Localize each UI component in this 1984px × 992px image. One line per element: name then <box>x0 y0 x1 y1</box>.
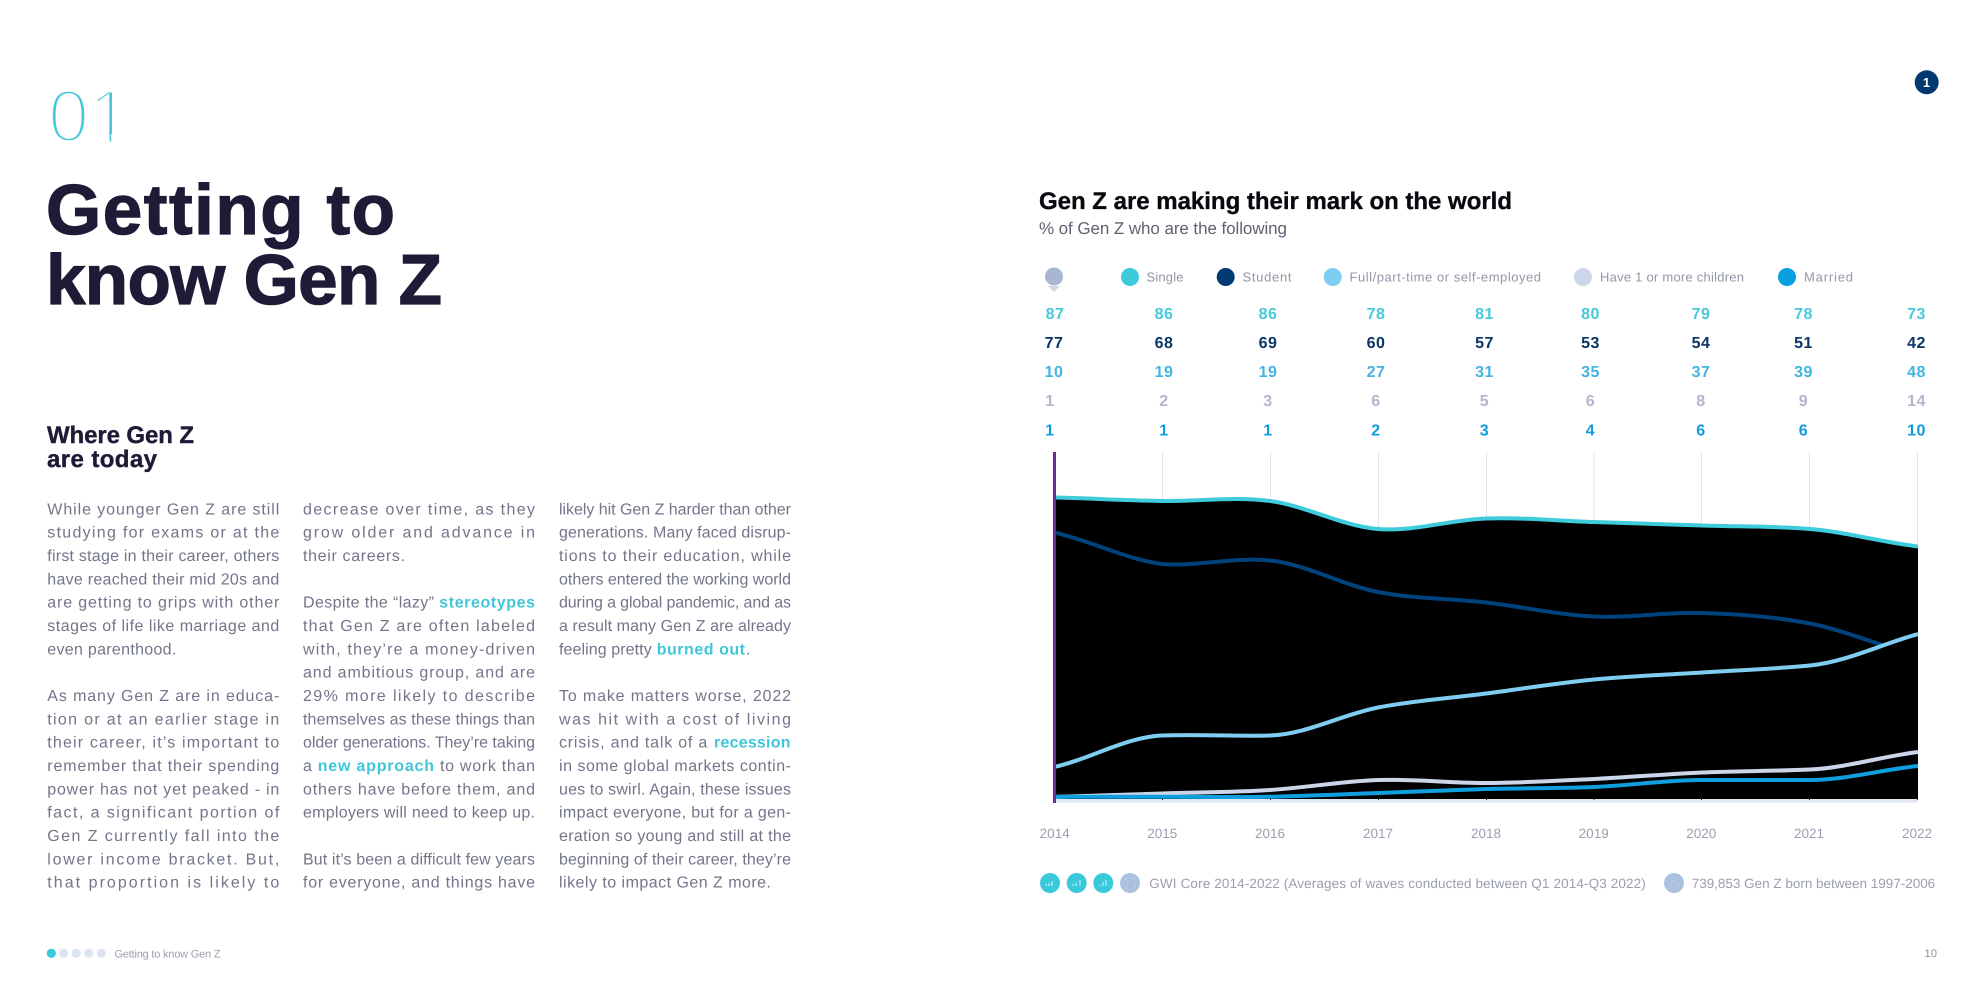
data row: married: 6 <box>1799 422 1808 440</box>
body text column 3: eration so young and still at the <box>559 828 791 845</box>
chart subtitle: % of Gen Z who are the following <box>1039 219 1287 238</box>
data row: employed: 19 <box>1259 364 1277 381</box>
body text column 3: a result many Gen Z are already <box>559 618 791 635</box>
body text column 2: with, they’re a money-driven <box>302 641 535 658</box>
data row: employed: 10 <box>1045 364 1063 381</box>
data row: single: 78 <box>1367 306 1385 323</box>
section number <box>52 92 112 142</box>
icon: globe <box>1120 873 1140 893</box>
y axis <box>1053 452 1056 803</box>
body text column 2: 29% more likely to describe <box>303 688 535 705</box>
body text column 1: tion or at an earlier stage in <box>47 711 279 728</box>
data row: single: 78 <box>1794 306 1813 323</box>
data row: children: 1 <box>1045 393 1055 410</box>
body text column 3: generations. Many faced disrup- <box>559 525 791 542</box>
footer: section name: Getting to know Gen Z <box>114 948 221 960</box>
body text column 1 <box>47 501 280 892</box>
body text column 3: likely to impact Gen Z more. <box>559 875 771 892</box>
data row: employed <box>1045 364 1926 381</box>
body text column 2: for everyone, and things have <box>303 875 535 892</box>
series: single <box>1056 500 1918 764</box>
legend item: married <box>1778 268 1853 286</box>
title <box>46 171 442 320</box>
x axis year labels: 2020 <box>1686 826 1716 841</box>
data row: children: 14 <box>1907 393 1926 410</box>
data row: employed: 27 <box>1367 364 1385 381</box>
data row: married: 6 <box>1696 422 1706 440</box>
subheading: Where Gen Z <box>47 422 194 449</box>
x axis year labels: 2019 <box>1579 826 1609 841</box>
body text column 1: lower income bracket. But, <box>47 851 279 868</box>
data row: single: 81 <box>1475 306 1494 323</box>
body text column 2: Despite the “lazy” <box>303 595 434 612</box>
body text column 3 <box>558 501 792 892</box>
body text column 2: to work than <box>440 758 535 775</box>
body text column 3: was hit with a cost of living <box>558 711 791 728</box>
data row: student: 69 <box>1259 335 1277 352</box>
data row: student: 54 <box>1692 335 1710 352</box>
body text column 2: others have before them, and <box>303 781 535 798</box>
source text: GWI Core 2014-2022 (Averages of waves conducted between Q1 2014-Q3 2022) <box>1149 876 1646 891</box>
body text column 1: have reached their mid 20s and <box>47 571 279 588</box>
data row: single <box>1046 306 1926 323</box>
data row: employed: 31 <box>1475 364 1494 381</box>
legend item: single: Single <box>1146 270 1184 284</box>
body text column 3: recession <box>714 735 790 752</box>
legend item: student: Student <box>1242 270 1292 284</box>
data row: employed: 35 <box>1581 364 1600 381</box>
page number: 10 <box>1924 948 1937 960</box>
legend item: single <box>1121 268 1184 286</box>
body text column 3: ues to swirl. Again, these issues <box>559 781 791 798</box>
line chart <box>1053 452 1918 803</box>
body text column 2: their careers. <box>303 548 405 565</box>
section number: 1 <box>89 74 130 158</box>
data row: married: 1 <box>1045 422 1055 440</box>
data row: married: 4 <box>1586 422 1595 440</box>
body text column 1: are getting to grips with other <box>47 595 280 612</box>
data row: children <box>1045 393 1926 410</box>
body text column 2: stereotypes <box>439 595 535 612</box>
data row: married: 3 <box>1480 422 1489 440</box>
icon: chart 2 <box>1067 873 1087 893</box>
body text column 1: their career, it’s important to <box>47 735 279 752</box>
body text column 2: But it’s been a difficult few years <box>303 851 535 868</box>
data row: employed: 39 <box>1794 364 1813 381</box>
body text column 1: power has not yet peaked - in <box>47 781 279 798</box>
data row: children: 6 <box>1371 393 1381 410</box>
legend <box>1045 268 1853 292</box>
body text column 2: employers will need to keep up. <box>303 805 535 822</box>
series: employed <box>1884 645 1918 657</box>
body text column 2: grow older and advance in <box>303 525 535 542</box>
data row: children: 9 <box>1799 393 1808 410</box>
data row: student: 77 <box>1045 335 1063 352</box>
data row: children: 3 <box>1263 393 1273 410</box>
body text column 3: crisis, and talk of a <box>559 735 707 752</box>
body text column 1: stages of life like marriage and <box>47 618 279 635</box>
data row: student <box>1045 335 1926 352</box>
body text column 2 <box>302 501 535 892</box>
icon: sample <box>1664 873 1684 893</box>
data row: student: 60 <box>1367 335 1385 352</box>
body text column 3: likely hit Gen Z harder than other <box>559 501 792 518</box>
body text column 1: As many Gen Z are in educa- <box>47 688 279 705</box>
data row: single: 87 <box>1046 306 1064 323</box>
body text column 2: decrease over time, as they <box>303 501 535 518</box>
series: student <box>1056 530 1884 646</box>
section number: 0 <box>48 74 89 158</box>
body text column 1: remember that their spending <box>47 758 279 775</box>
data row: children: 6 <box>1586 393 1595 410</box>
icon: location pin <box>1045 268 1063 292</box>
body text column 2: that Gen Z are often labeled <box>303 618 535 635</box>
body text column 1: Gen Z currently fall into the <box>47 828 279 845</box>
data row: children: 5 <box>1480 393 1489 410</box>
body text column 1: first stage in their career, others <box>47 548 279 565</box>
data row: student: 53 <box>1581 335 1600 352</box>
body text column 3: . <box>746 641 750 658</box>
footer: section progress dots <box>47 949 106 958</box>
body text column 3: feeling pretty <box>559 641 652 658</box>
subheading: are today <box>47 446 158 473</box>
data row: married: 1 <box>1159 422 1169 440</box>
body text column 1: that proportion is likely to <box>47 875 279 892</box>
legend item: student <box>1217 268 1292 286</box>
icon: chart 1 <box>1040 873 1060 893</box>
body text column 1: fact, a significant portion of <box>47 805 280 822</box>
x axis year labels: 2014 <box>1040 826 1070 841</box>
data row: single: 73 <box>1907 306 1926 323</box>
body text column 3: during a global pandemic, and as <box>559 595 791 612</box>
data row: employed: 37 <box>1692 364 1710 381</box>
body text column 1: While younger Gen Z are still <box>47 501 279 518</box>
data row: single: 86 <box>1155 306 1173 323</box>
title: Getting to <box>46 171 395 250</box>
body text column 2: themselves as these things than <box>303 711 535 728</box>
body text column 3: tions to their education, while <box>559 548 791 565</box>
data row: single: 86 <box>1259 306 1277 323</box>
body text column 2: a <box>303 758 312 775</box>
data row: married: 10 <box>1907 422 1926 440</box>
data row: single: 80 <box>1581 306 1600 323</box>
title: know Gen Z <box>46 241 442 320</box>
series: children <box>1054 752 1918 797</box>
data row: student: 51 <box>1794 335 1813 352</box>
chart title: Gen Z are making their mark on the world <box>1039 188 1512 215</box>
data row: student: 42 <box>1907 335 1926 352</box>
body text column 3: impact everyone, but for a gen- <box>559 805 791 822</box>
icon: chart 3 <box>1093 873 1113 893</box>
body text column 3: in some global markets contin- <box>559 758 791 775</box>
body text column 3: beginning of their career, they’re <box>559 851 791 868</box>
data row: employed: 48 <box>1907 364 1926 381</box>
x axis year labels: 2018 <box>1471 826 1501 841</box>
data row: married <box>1045 422 1926 440</box>
data row: student: 68 <box>1155 335 1173 352</box>
sample text: 739,853 Gen Z born between 1997-2006 <box>1692 876 1935 891</box>
series: married <box>1054 766 1918 797</box>
data row: student: 57 <box>1475 335 1494 352</box>
body text column 3: burned out <box>657 641 746 658</box>
legend item: children: Have 1 or more children <box>1600 270 1744 284</box>
x axis year labels: 2015 <box>1147 826 1177 841</box>
data row: children: 2 <box>1159 393 1169 410</box>
x axis year labels: 2021 <box>1794 826 1824 841</box>
legend item: employed: Full/part-time or self-employed <box>1350 270 1541 284</box>
data row: children: 8 <box>1696 393 1706 410</box>
x axis year labels: 2022 <box>1902 826 1932 841</box>
body text column 2: and ambitious group, and are <box>303 665 535 682</box>
body text column 2: new approach <box>318 758 434 775</box>
body text column 1: even parenthood. <box>47 641 176 658</box>
x axis year labels: 2016 <box>1255 826 1285 841</box>
badge: chart number <box>1915 70 1939 94</box>
body text column 3: To make matters worse, 2022 <box>559 688 791 705</box>
data row: employed: 19 <box>1155 364 1173 381</box>
x axis year labels <box>1040 826 1932 841</box>
data row: single: 79 <box>1692 306 1710 323</box>
body text column 1: studying for exams or at the <box>47 525 279 542</box>
data row: married: 1 <box>1263 422 1273 440</box>
body text column 2: older generations. They’re taking <box>303 735 535 752</box>
subheading <box>47 422 194 473</box>
source icons <box>1040 873 1140 893</box>
badge: chart number: 1 <box>1923 75 1930 90</box>
x axis year labels: 2017 <box>1363 826 1393 841</box>
legend item: married: Married <box>1804 270 1853 284</box>
body text column 3: others entered the working world <box>559 571 791 588</box>
data row: married: 2 <box>1371 422 1381 440</box>
